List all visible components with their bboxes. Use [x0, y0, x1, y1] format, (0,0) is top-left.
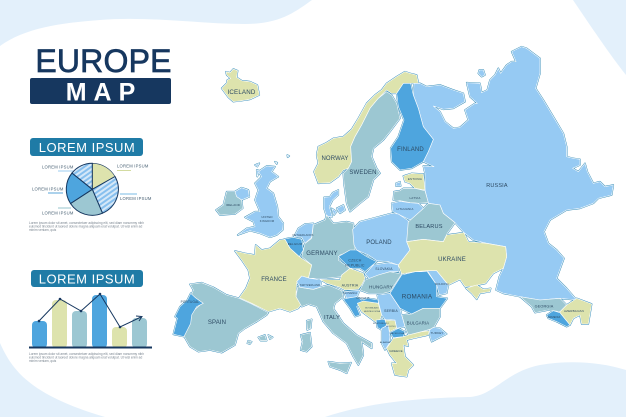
country labels: AZERBAIJAN: [564, 309, 584, 313]
Finland: [391, 83, 433, 170]
country labels: POLAND: [366, 240, 392, 246]
Slovakia: [365, 263, 398, 279]
Northern Ireland: [235, 188, 249, 200]
pie text block: Lorem ipsum dolor sit amet, consectetuer adipiscing elit, sed diam nonummy nibh: [29, 221, 144, 225]
bar text block: [29, 352, 144, 363]
country labels: [181, 89, 584, 353]
title: Europe Map: MAP: [66, 78, 142, 106]
Sardinia: [301, 333, 312, 352]
Arctic island: [478, 70, 485, 77]
country labels: SWITZERLAND: [300, 283, 320, 287]
Sweden: [343, 92, 400, 212]
Romania: [390, 272, 447, 314]
pie text block: euismod tincidunt ut laoreet dolore magna aliquam erat volutpat. Ut wisi enim ad: [29, 224, 142, 228]
Armenia: [547, 311, 570, 327]
country labels: LITHUANIA: [396, 207, 414, 211]
country labels: CZECH: [348, 258, 362, 262]
Balearic islands: [247, 335, 273, 344]
Albania: [382, 325, 390, 350]
country labels: HERZEGOVINA: [364, 310, 381, 313]
pie labels and arrows: LOREM IPSUM: [120, 196, 152, 201]
country labels: BULGARIA: [407, 320, 429, 326]
country labels: MACEDONIA: [390, 332, 405, 335]
Spain: [183, 283, 268, 353]
country labels: NORWAY: [321, 156, 349, 162]
country labels: CROATIA: [356, 296, 370, 300]
country labels: SWEDEN: [349, 170, 377, 176]
country labels: SLOVENIA: [343, 291, 357, 295]
map of Europe: [173, 47, 613, 377]
pie text block: minim veniam, quis: [29, 228, 57, 232]
Latvia: [393, 188, 428, 203]
Lithuania: [392, 201, 423, 220]
country labels: ROMANIA: [402, 293, 433, 300]
country labels: ITALY: [324, 315, 340, 321]
pie labels and arrows: LOREM IPSUM: [42, 164, 74, 170]
Denmark: [324, 190, 338, 217]
axis: [29, 346, 152, 348]
Italy: [296, 285, 372, 365]
country labels: SPAIN: [208, 320, 226, 326]
map outline underlay: [173, 47, 613, 377]
Kosovo: [385, 320, 397, 332]
country labels: BELARUS: [415, 224, 443, 230]
heading: bar panel: LOREM IPSUM: [39, 272, 135, 286]
pie labels and arrows: LOREM IPSUM: [42, 210, 74, 216]
Estonia: [403, 173, 425, 190]
country labels: REPUBLIC: [345, 264, 365, 268]
pie labels and arrows: [32, 164, 152, 216]
country labels: ESTONIA: [408, 177, 422, 181]
Serbia: [377, 293, 405, 328]
Netherlands: [294, 223, 313, 243]
Montenegro: [376, 319, 388, 330]
Belgium: [284, 237, 303, 257]
country labels: BOSNIA AND: [365, 306, 379, 310]
Bosnia and Herzegovina: [357, 301, 382, 324]
heading: pie panel: LOREM IPSUM: [39, 140, 135, 155]
country labels: NETHERLANDS: [293, 233, 314, 237]
pie text block: [29, 221, 144, 232]
British islands: [255, 155, 289, 177]
country labels: UKRAINE: [438, 257, 466, 263]
Hungary: [360, 272, 402, 293]
panel: pie chart: [29, 138, 152, 232]
Ukraine: [398, 233, 507, 287]
country labels: PORTUGAL: [181, 300, 199, 304]
Austria: [320, 268, 365, 290]
country labels: MONTENEGRO: [373, 323, 389, 325]
France: [235, 239, 312, 312]
Portugal: [173, 293, 203, 337]
panel: bar chart: [29, 270, 152, 363]
Belarus: [407, 203, 455, 242]
Crimea: [466, 285, 491, 299]
Poland: [353, 213, 410, 265]
country labels: LATVIA: [409, 196, 421, 200]
Norway: [314, 72, 418, 183]
bar text block: Lorem ipsum dolor sit amet, consectetuer adipiscing elit, sed diam nonummy nibh: [29, 352, 144, 356]
Switzerland: [297, 276, 322, 289]
country labels: GERMANY: [306, 251, 338, 257]
country labels: IRELAND: [226, 203, 241, 207]
Corsica: [307, 319, 312, 330]
country labels: RUSSIA: [486, 183, 508, 189]
country labels: FINLAND: [397, 147, 424, 153]
Moldova: [427, 271, 448, 295]
Russia: [413, 47, 613, 300]
country labels: SLOVAKIA: [375, 267, 393, 271]
pie labels and arrows: LOREM IPSUM: [117, 164, 149, 168]
country labels: ALBANIA: [380, 341, 391, 344]
pie chart: [66, 163, 118, 215]
Danish islands: [332, 205, 345, 215]
Turkey: [429, 327, 447, 342]
country labels: ICELAND: [228, 89, 256, 96]
bar text block: minim veniam, quis: [29, 359, 57, 363]
Georgia: [520, 297, 567, 313]
country labels: KOSOVO: [386, 326, 396, 328]
Greece: [387, 331, 429, 377]
Croatia: [343, 297, 378, 317]
bars: [32, 295, 147, 348]
Estonian island: [396, 182, 401, 186]
title: Europe Map: [30, 43, 172, 106]
title: Europe Map: EUROPE: [35, 43, 172, 79]
country labels: AUSTRIA: [342, 283, 359, 287]
United Kingdom: [238, 166, 283, 237]
Germany: [302, 215, 355, 278]
pie labels and arrows: LOREM IPSUM: [32, 186, 64, 192]
country labels: KINGDOM: [260, 219, 275, 223]
country labels: FRANCE: [261, 277, 287, 283]
trend arrow: [38, 293, 142, 328]
country labels: MOLDOVA: [435, 282, 449, 286]
Azerbaijan: [560, 298, 592, 325]
country labels: GREECE: [389, 349, 403, 353]
Ireland: [216, 188, 249, 215]
country labels: ARMENIA: [548, 315, 561, 319]
Bulgaria: [402, 308, 440, 335]
Iceland: [222, 69, 259, 102]
country labels: HUNGARY: [369, 285, 393, 290]
country labels: TURKEY: [430, 331, 444, 335]
Slovenia: [344, 290, 360, 298]
bar text block: euismod tincidunt ut laoreet dolore magna aliquam erat volutpat. Ut wisi enim ad: [29, 356, 142, 360]
Sicily: [328, 362, 351, 373]
Czech Republic: [338, 250, 377, 272]
Macedonia: [390, 328, 405, 338]
country labels: SERBIA: [384, 309, 398, 313]
country labels: UNITED: [261, 215, 273, 219]
country labels: GEORGIA: [535, 304, 554, 308]
country labels: BELGIUM: [288, 242, 303, 246]
